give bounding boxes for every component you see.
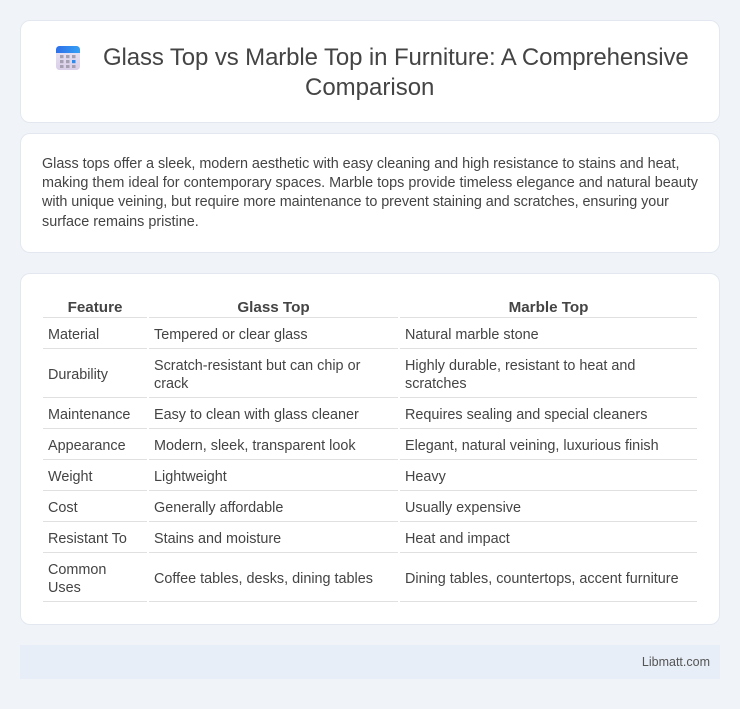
row: common uses — [48, 562, 679, 596]
row: resistant to: Resistant To — [48, 531, 127, 547]
row: cost: Usually expensive — [405, 500, 521, 516]
row: common uses: Dining tables, countertops, accent furniture — [405, 571, 679, 587]
intro text: with unique veining, but require more maintenance to prevent staining and scratches, ensuring your — [42, 194, 669, 210]
row: maintenance: Easy to clean with glass cleaner — [154, 407, 359, 423]
row: cost: Cost — [48, 500, 78, 516]
row: material: Material — [48, 327, 99, 343]
row: resistant to — [48, 531, 510, 547]
row: durability: Scratch-resistant but can chip or — [154, 358, 360, 374]
panel: introduction — [20, 133, 720, 253]
row: maintenance: Requires sealing and special cleaners — [405, 407, 647, 423]
panel: title card — [20, 20, 720, 123]
row: weight: Lightweight — [154, 469, 227, 485]
row: weight: Weight — [48, 469, 93, 485]
row: material: Natural marble stone — [405, 327, 539, 343]
row: resistant to: Heat and impact — [405, 531, 510, 547]
title: Glass Top vs Marble Top in Furniture: A Comprehensive — [103, 44, 689, 71]
footer bar — [20, 645, 720, 679]
row: material — [48, 327, 539, 343]
row: maintenance: Maintenance — [48, 407, 130, 423]
intro text: Glass tops offer a sleek, modern aesthetic with easy cleaning and high resistance to stains and heat, — [42, 156, 679, 172]
icon: calendar — [56, 46, 80, 70]
row: cost — [48, 500, 521, 516]
title: Comparison — [305, 74, 434, 101]
title — [103, 44, 689, 101]
row: durability: Durability — [48, 367, 108, 383]
row: appearance — [48, 438, 659, 454]
row: durability: crack — [154, 376, 188, 392]
row: durability: Highly durable, resistant to heat and — [405, 358, 635, 374]
row: material: Tempered or clear glass — [154, 327, 308, 343]
table header: Feature — [68, 299, 122, 316]
table header: Glass Top — [237, 299, 310, 316]
row: weight: Heavy — [405, 469, 446, 485]
row: appearance: Elegant, natural veining, luxurious finish — [405, 438, 659, 454]
row: maintenance — [48, 407, 647, 423]
table header: Marble Top — [509, 299, 588, 316]
intro text: making them ideal for contemporary spaces. Marble tops provide timeless elegance and natural beauty — [42, 175, 698, 191]
row: resistant to: Stains and moisture — [154, 531, 281, 547]
row: cost: Generally affordable — [154, 500, 283, 516]
intro text — [42, 156, 698, 230]
row: appearance: Appearance — [48, 438, 126, 454]
panel: comparison table — [20, 273, 720, 625]
intro text: surface remains pristine. — [42, 214, 199, 230]
row: durability — [48, 358, 635, 392]
row: appearance: Modern, sleek, transparent look — [154, 438, 356, 454]
row: common uses: Common — [48, 562, 106, 578]
row: common uses: Uses — [48, 580, 81, 596]
table header — [68, 299, 588, 316]
row: weight — [48, 469, 446, 485]
row: durability: scratches — [405, 376, 467, 392]
row: common uses: Coffee tables, desks, dining tables — [154, 571, 373, 587]
footer text: Libmatt.com — [642, 655, 710, 669]
